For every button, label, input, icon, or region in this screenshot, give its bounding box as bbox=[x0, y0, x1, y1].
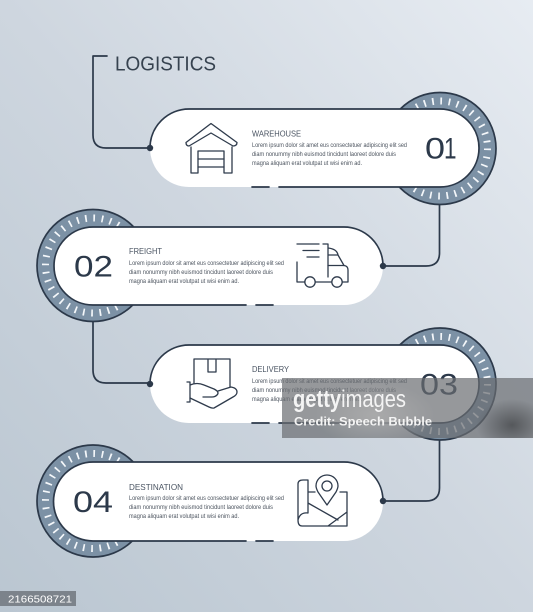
body text: freight: diam nonummy nibh euismod tincidunt laoreet dolore duis bbox=[129, 269, 273, 276]
connector dot 03 bbox=[147, 381, 153, 387]
connector: ring 03 to panel 04 bbox=[383, 441, 440, 501]
connector: ring 02 to panel 03 bbox=[93, 322, 150, 383]
body text: warehouse: Lorem ipsum dolor sit amet eus consectetuer adipiscing elit sed bbox=[252, 142, 407, 149]
icon: delivery truck bbox=[297, 244, 348, 287]
body text: delivery bbox=[252, 378, 407, 403]
panel: delivery bbox=[147, 328, 496, 440]
body text: warehouse bbox=[252, 142, 407, 167]
pill outline 01 bbox=[150, 109, 479, 187]
watermark credit: Credit: Speech Bubble bbox=[294, 416, 432, 428]
image id badge: 2166508721 bbox=[8, 594, 72, 606]
number 01: 1 bbox=[444, 131, 457, 165]
dial ring 03 bbox=[384, 328, 496, 440]
icon: warehouse bbox=[186, 124, 237, 173]
number 04: 04 bbox=[73, 486, 113, 519]
pill card 02 bbox=[54, 227, 383, 305]
title bracket connector bbox=[93, 56, 150, 148]
title text: LOGISTICS bbox=[115, 52, 216, 76]
body text: freight: magna aliquam erat volutpat ut wisi enim ad. bbox=[129, 278, 239, 285]
number 01 bbox=[425, 131, 457, 166]
connector dot 02 bbox=[380, 263, 386, 269]
body text: freight: Lorem ipsum dolor sit amet eus consectetuer adipiscing elit sed bbox=[129, 260, 284, 267]
pill card 01 bbox=[150, 109, 479, 187]
watermark logo: gettyimages bbox=[293, 386, 406, 413]
number 03: 03 bbox=[420, 368, 458, 402]
pill card 03 bbox=[150, 345, 479, 423]
icon: map with pin bbox=[298, 475, 347, 526]
panel: freight bbox=[37, 210, 386, 322]
watermark band bbox=[282, 378, 533, 438]
body text: destination: Lorem ipsum dolor sit amet eus consectetuer adipiscing elit sed bbox=[129, 495, 284, 502]
body text: delivery: magna aliquam erat volutpat ut wisi enim ad. bbox=[252, 396, 362, 403]
body text: warehouse: diam nonummy nibh euismod tincidunt laoreet dolore duis bbox=[252, 151, 396, 158]
title bbox=[93, 52, 216, 148]
image id badge bbox=[0, 591, 76, 606]
dial ring 02 bbox=[37, 210, 149, 322]
body text: delivery: diam nonummy nibh euismod tincidunt laoreet dolore duis bbox=[252, 387, 396, 394]
heading: destination: DESTINATION bbox=[129, 483, 183, 492]
connector: ring 01 to panel 02 bbox=[383, 205, 440, 266]
number 02: 02 bbox=[74, 250, 113, 284]
body text: freight bbox=[129, 260, 284, 285]
body text: destination: diam nonummy nibh euismod tincidunt laoreet dolore duis bbox=[129, 504, 273, 511]
body text: destination bbox=[129, 495, 284, 520]
body text: warehouse: magna aliquam erat volutpat ut wisi enim ad. bbox=[252, 160, 362, 167]
pill card 04 bbox=[54, 462, 383, 541]
connector dot 01 bbox=[147, 145, 153, 151]
panel: destination bbox=[37, 445, 386, 557]
number 01: 0 bbox=[425, 132, 445, 166]
body text: destination: magna aliquam erat volutpat ut wisi enim ad. bbox=[129, 513, 239, 520]
heading: warehouse: WAREHOUSE bbox=[252, 130, 301, 138]
pill outline 04 bbox=[54, 462, 383, 541]
body text: delivery: Lorem ipsum dolor sit amet eus consectetuer adipiscing elit sed bbox=[252, 378, 407, 385]
heading: freight: FREIGHT bbox=[129, 247, 162, 256]
icon: hand holding box bbox=[187, 359, 237, 408]
pill outline 02 bbox=[54, 227, 383, 305]
panel: warehouse bbox=[147, 92, 496, 204]
connector dot 04 bbox=[380, 498, 386, 504]
pill outline 03 bbox=[150, 345, 479, 423]
dial ring 01 bbox=[384, 92, 496, 204]
dial ring 04 bbox=[37, 445, 149, 557]
heading: delivery: DELIVERY bbox=[252, 365, 289, 374]
